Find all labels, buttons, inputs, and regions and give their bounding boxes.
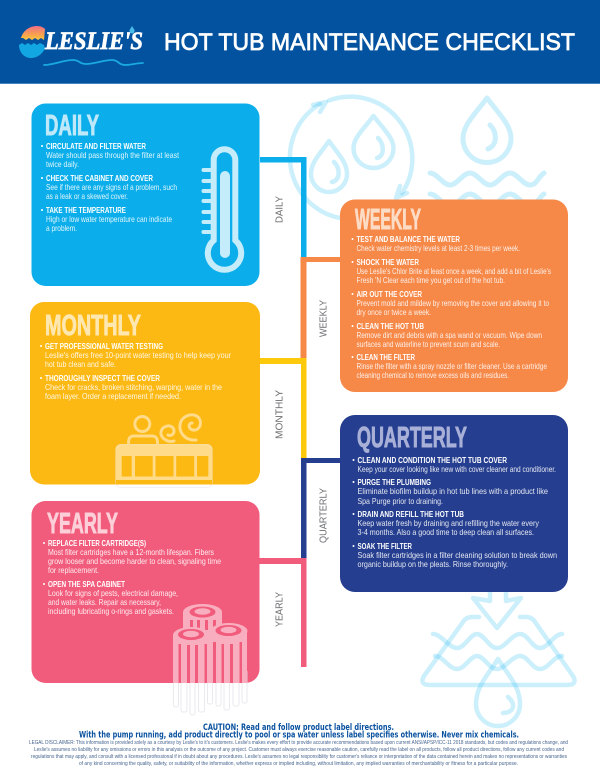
item: thoroughly inspect the cover: Check for cracks, broken stitching, warping, water in the [45,382,222,392]
timeline label: quarterly: QUARTERLY [318,488,330,543]
item: open the spa cabinet [43,579,178,616]
item: get professional water testing: Leslie's offers free 10-point water testing to help keep your [45,350,231,360]
icon: thermometer [204,149,241,270]
timeline label: daily: DAILY [273,196,285,223]
item: clean and condition the hot tub cover [352,455,556,474]
title: HOT TUB MAINTENANCE CHECKLIST [164,29,575,56]
item: circulate and filter water: twice daily. [46,159,79,169]
caution text: CAUTION: Read and follow product label directions. [203,722,394,732]
item: drain and refill the hot tub: DRAIN AND REFILL THE HOT TUB [358,509,464,519]
item: take the temperature [41,205,172,233]
item: soak the filter [352,541,557,569]
item: check the cabinet and cover: as a leak or a skewed cover. [46,191,128,201]
item: thoroughly inspect the cover [40,373,222,401]
item: get professional water testing [40,341,231,369]
item: clean the hot tub: CLEAN THE HOT TUB [356,321,424,331]
item: soak the filter: Soak filter cartridges in a filter cleaning solution to break down [358,550,557,560]
item: circulate and filter water: CIRCULATE AND FILTER WATER [46,141,147,151]
logo: Leslie's [19,26,143,65]
item: air out the cover: Prevent mold and mildew by removing the cover and allowing it to [356,298,549,308]
item: check the cabinet and cover: CHECK THE CABINET AND COVER [46,173,154,183]
icon: hot tub [116,415,212,488]
legal disclaimer: of any kind concerning the quality, safety, or suitability of the information, whether express or implied including, without limitation, any implied warranties of merchantability or fitness for a particular purpose. [79,761,518,767]
item: air out the cover [352,289,549,317]
item: clean the hot tub: surfaces and waterline to prevent scum and scale. [356,339,500,349]
item: replace filter cartridges: REPLACE FILTER CARTRIDGE(S) [48,538,146,548]
background icon: recycle circle with two drops [290,97,412,218]
item: thoroughly inspect the cover: foam layer. Order a replacement if needed. [45,391,181,401]
item: take the temperature: TAKE THE TEMPERATURE [46,205,126,215]
item: air out the cover: dry once or twice a week. [356,307,431,317]
item: test and balance the water [352,234,520,253]
timeline label: weekly: WEEKLY [318,300,330,337]
item: replace filter cartridges: Most filter cartridges have a 12-month lifespan. Fibers [48,547,214,557]
item: purge the plumbing: Spa Purge prior to draining. [358,496,443,506]
heading: daily: DAILY [45,110,99,142]
item: purge the plumbing: PURGE THE PLUMBING [358,477,431,487]
timeline label: yearly: YEARLY [273,592,285,627]
item: open the spa cabinet: OPEN THE SPA CABINET [48,579,126,589]
item: take the temperature: a problem. [46,223,77,233]
item: replace filter cartridges [43,538,221,575]
item: check the cabinet and cover [41,173,177,201]
item: clean the filter: CLEAN THE FILTER [356,352,416,362]
panel: yearly [32,501,260,715]
item: replace filter cartridges: for replacement. [48,565,99,575]
item: get professional water testing: GET PROFESSIONAL WATER TESTING [45,341,163,351]
timeline connector: daily [260,157,306,257]
item: clean the filter: cleaning chemical to remove excess oils and residues. [356,370,509,380]
timeline connector: weekly [300,257,340,358]
item: clean the filter [352,352,547,380]
item: shock the water: Fresh 'N Clear each time you get out of the hot tub. [356,275,505,285]
item: thoroughly inspect the cover: THOROUGHLY INSPECT THE COVER [45,373,161,383]
heading: weekly: WEEKLY [355,204,421,236]
item: clean the hot tub: Remove dirt and debris with a spa wand or vacuum. Wipe down [356,330,542,340]
item: shock the water: SHOCK THE WATER [356,257,420,267]
panel: daily [32,104,260,286]
item: clean the filter: Rinse the filter with a spray nozzle or filter cleaner. Use a cartridge [356,361,547,371]
item: replace filter cartridges: grow looser and become harder to clean, signaling time [48,556,221,566]
item: drain and refill the hot tub [352,509,540,537]
item: clean the hot tub [352,321,542,349]
legal disclaimer [29,740,568,767]
heading: monthly: MONTHLY [45,310,141,342]
heading: quarterly: QUARTERLY [357,422,467,454]
item: soak the filter: organic buildup on the pleats. Rinse thoroughly. [358,559,508,569]
panel: monthly [30,302,260,488]
panel: quarterly [340,415,568,592]
item: purge the plumbing [352,477,548,506]
item: air out the cover: AIR OUT THE COVER [356,289,423,299]
logo: Leslie's: LESLIE'S [44,28,143,55]
timeline connector: yearly [258,558,306,667]
heading: yearly: YEARLY [47,508,118,540]
item: clean and condition the hot tub cover: CLEAN AND CONDITION THE HOT TUB COVER [358,455,508,465]
item: drain and refill the hot tub: 3-4 months. Also a good time to deep clean all surfaces. [358,527,534,537]
panel: weekly [340,200,568,392]
item: test and balance the water: Check water chemistry levels at least 2-3 times per week. [356,243,520,253]
item: take the temperature: High or low water temperature can indicate [46,214,172,224]
item: soak the filter: SOAK THE FILTER [358,541,413,551]
caution text [79,722,519,740]
timeline label: monthly: MONTHLY [273,390,285,439]
background icon: water drop over waves [430,98,544,206]
background icon: filter triangle with arrow and drop [422,590,575,726]
item: test and balance the water: TEST AND BALANCE THE WATER [356,234,461,244]
item: open the spa cabinet: and water leaks. Repair as necessary, [48,597,161,607]
item: get professional water testing: hot tub clean and safe. [45,359,116,369]
item: shock the water [352,257,551,285]
header banner [0,0,600,84]
item: purge the plumbing: Eliminate biofilm buildup in hot tub lines with a product like [358,486,548,496]
item: open the spa cabinet: including lubricating o-rings and gaskets. [48,606,174,616]
item: circulate and filter water [41,141,180,169]
item: open the spa cabinet: Look for signs of pests, electrical damage, [48,588,178,598]
item: circulate and filter water: Water should pass through the filter at least [46,150,180,160]
icon: filter cartridges [173,604,248,715]
item: check the cabinet and cover: See if there are any signs of a problem, such [46,182,177,192]
timeline connector: monthly [258,358,306,458]
item: drain and refill the hot tub: Keep water fresh by draining and refilling the water every [358,518,540,528]
timeline connector: quarterly [301,458,340,558]
